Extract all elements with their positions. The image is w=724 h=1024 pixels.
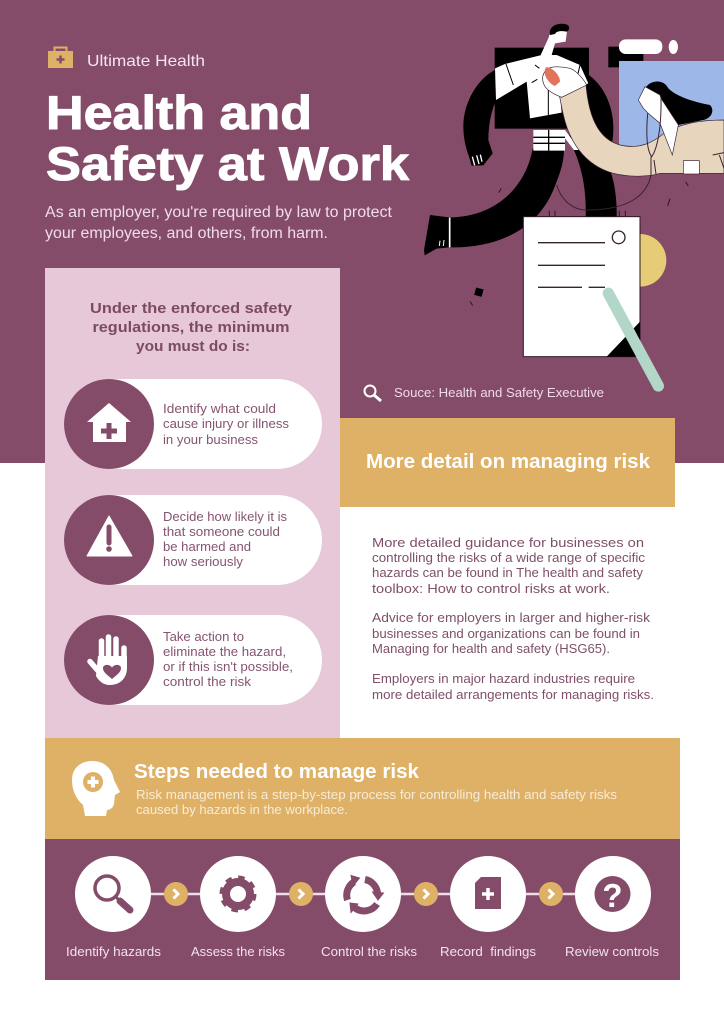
panel: more detail heading	[340, 418, 675, 507]
icon: question mark: ?	[602, 877, 623, 914]
step 2: assess the risks: Assess the risks	[191, 944, 285, 959]
title: Safety at Work	[46, 137, 410, 190]
step arrow	[289, 882, 313, 906]
title	[46, 86, 410, 190]
step 3: control the risks	[321, 856, 418, 959]
intro text: your employees, and others, from harm.	[45, 225, 328, 242]
text block: more detail: More detailed guidance for businesses on	[372, 535, 644, 550]
item: take action: eliminate the hazard,	[163, 644, 286, 659]
item: decide	[64, 495, 322, 585]
brand: Ultimate Health	[48, 48, 205, 70]
step arrow	[539, 882, 563, 906]
text block: more detail: hazards can be found in The health and safety	[372, 565, 643, 580]
panel heading	[90, 300, 293, 355]
text block: more detail	[372, 535, 654, 702]
icon: magnifier	[95, 876, 130, 910]
panel: steps heading: Steps needed to manage risk	[134, 761, 420, 783]
panel: more detail heading: More detail on managing risk	[366, 451, 651, 473]
text block: more detail: toolbox: How to control risks at work.	[372, 581, 610, 596]
step 1: identify hazards	[66, 856, 162, 959]
item: identify: Identify what could	[163, 401, 276, 416]
step 2: assess the risks	[191, 856, 285, 959]
icon: head with cross	[72, 761, 120, 816]
step 3: control the risks: Control the risks	[321, 944, 418, 959]
icon: gear	[222, 878, 254, 910]
brand name: Ultimate Health	[87, 53, 205, 70]
item: identify: cause injury or illness	[163, 416, 289, 431]
source note with search icon: Souce: Health and Safety Executive	[394, 385, 604, 400]
intro text	[45, 204, 393, 242]
item: decide: that someone could	[163, 524, 280, 539]
step 5: review controls	[565, 856, 660, 959]
item: decide: how seriously	[163, 554, 243, 569]
item: identify	[64, 379, 322, 469]
step arrow	[414, 882, 438, 906]
panel: process steps	[45, 839, 680, 980]
icon: house with cross	[87, 403, 131, 442]
panel heading: Under the enforced safety	[90, 300, 293, 317]
icon: document with plus	[475, 877, 501, 909]
title: Health and	[46, 86, 312, 139]
panel heading: you must do is:	[136, 338, 250, 355]
item: take action: or if this isn't possible,	[163, 659, 293, 674]
step 4: record findings	[440, 856, 536, 959]
step arrow	[164, 882, 188, 906]
intro text: As an employer, you're required by law to protect	[45, 204, 393, 221]
text block: more detail: Employers in major hazard industries require	[372, 671, 635, 686]
item: decide: be harmed and	[163, 539, 251, 554]
item: decide: Decide how likely it is	[163, 509, 287, 524]
item: take action	[64, 615, 322, 705]
step 1: identify hazards: Identify hazards	[66, 944, 162, 959]
icon: warning triangle	[87, 516, 132, 556]
text block: more detail: more detailed arrangements for managing risks.	[372, 687, 654, 702]
step 5: review controls: Review controls	[565, 944, 660, 959]
text block: more detail: Managing for health and safety (HSG65).	[372, 641, 610, 656]
panel: minimum requirements	[45, 268, 340, 738]
panel: steps heading: Risk management is a step-by-step process for controlling health and safety risks	[136, 787, 618, 802]
step 4: record findings: Record findings	[440, 944, 536, 959]
icon: first aid briefcase	[48, 48, 73, 68]
text block: more detail: controlling the risks of a wide range of specific	[372, 550, 646, 565]
item: take action: Take action to	[163, 629, 244, 644]
text block: more detail: Advice for employers in larger and higher-risk	[372, 610, 651, 625]
illustration: doctor, patient and clipboard	[420, 10, 724, 386]
icon: cycle arrows	[347, 876, 384, 912]
panel: steps heading: caused by hazards in the workplace.	[136, 802, 348, 817]
text block: more detail: businesses and organizations can be found in	[372, 626, 640, 641]
panel heading: regulations, the minimum	[92, 319, 290, 336]
item: identify: in your business	[163, 432, 258, 447]
icon: search	[364, 386, 381, 401]
item: take action: control the risk	[163, 674, 252, 689]
panel: steps heading	[45, 738, 680, 839]
icon: hand with heart	[90, 637, 127, 685]
background: purple header	[0, 0, 724, 463]
